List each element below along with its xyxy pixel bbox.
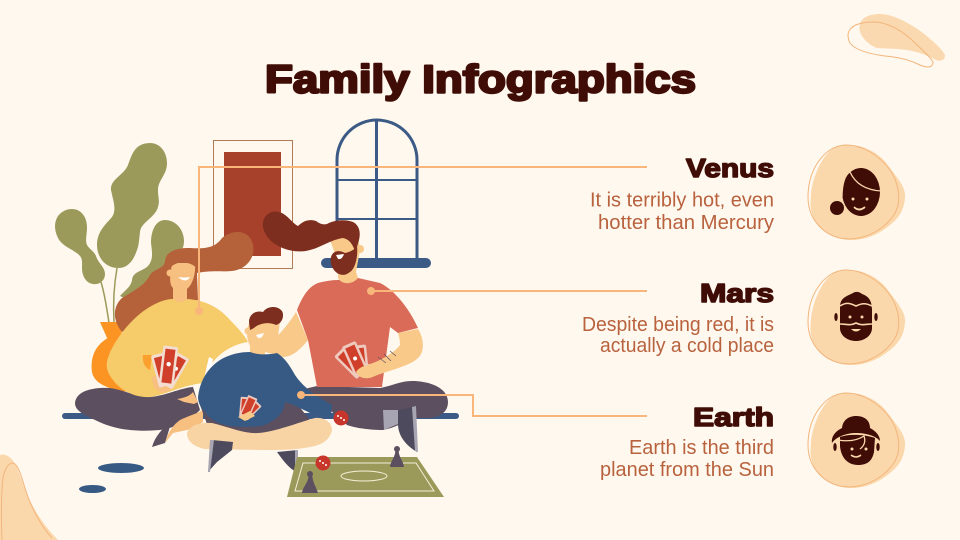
title: Family Infographics <box>265 58 696 102</box>
woman fringe <box>165 248 197 268</box>
text: Earth description: Earth is the third <box>629 437 774 459</box>
woman hair <box>115 232 253 332</box>
game pawns <box>302 446 404 493</box>
text: Mars description <box>582 314 774 357</box>
decoration: bottom-left leaf <box>0 455 58 540</box>
floor bar <box>62 413 459 419</box>
icon: person with hat in blob <box>808 393 905 488</box>
boy smile <box>256 333 264 338</box>
connector: Earth <box>297 391 647 416</box>
woman cards <box>151 345 190 390</box>
text: Venus description <box>590 190 774 234</box>
boy shoe left <box>208 440 233 472</box>
woman hand <box>152 376 174 392</box>
woman sleeve detail <box>143 355 152 370</box>
text: Earth description: planet from the Sun <box>600 459 774 481</box>
woman legs <box>75 387 200 431</box>
item: Venus <box>590 153 774 234</box>
connector: Venus <box>195 167 647 315</box>
item: Mars <box>582 278 774 357</box>
boy sweater <box>198 352 332 427</box>
man smile <box>336 254 344 259</box>
game board <box>287 457 444 497</box>
boy shoe right <box>277 450 298 473</box>
boy hair <box>249 307 283 330</box>
woman smile <box>178 277 190 280</box>
text: Earth description <box>600 437 774 481</box>
plant pot <box>92 322 130 392</box>
boy <box>187 307 332 473</box>
illustration: family playing cards <box>55 120 459 497</box>
man legs <box>283 381 448 430</box>
text: Mars description: actually a cold place <box>600 335 774 357</box>
man neck and face <box>330 235 360 283</box>
connector: Mars <box>367 287 647 295</box>
boy head <box>247 320 280 356</box>
boy pants <box>200 395 310 434</box>
dice <box>316 410 348 470</box>
decoration: top-right leaf <box>848 14 945 67</box>
icon: woman in blob <box>808 145 905 240</box>
floor shadows <box>79 463 144 493</box>
woman face <box>170 263 195 302</box>
man shirt <box>297 278 418 387</box>
boy cards <box>239 395 262 421</box>
item: Earth <box>600 402 774 481</box>
plant <box>55 143 190 323</box>
man hair <box>263 211 360 251</box>
man left arm <box>258 312 308 357</box>
boy legs <box>187 418 332 450</box>
text: Venus description: hotter than Mercury <box>598 212 774 234</box>
man shoe <box>383 406 418 452</box>
boy hand <box>238 411 255 421</box>
heading: Mars: Mars <box>700 278 774 308</box>
heading: Earth: Earth <box>693 402 774 432</box>
text: Mars description: Despite being red, it is <box>582 314 774 336</box>
woman sweater highlight <box>205 357 213 374</box>
text: Venus description: It is terribly hot, even <box>590 190 774 212</box>
wall painting <box>214 140 292 268</box>
man beard <box>331 246 357 275</box>
heading: Venus: Venus <box>686 153 774 183</box>
man right arm <box>356 329 423 378</box>
man hand <box>356 365 376 378</box>
icon: bearded man in blob <box>808 270 905 365</box>
woman foot <box>152 420 172 447</box>
man <box>258 211 448 452</box>
man cards <box>334 341 369 379</box>
woman sweater <box>107 299 248 397</box>
woman <box>75 232 253 447</box>
window <box>321 120 431 268</box>
